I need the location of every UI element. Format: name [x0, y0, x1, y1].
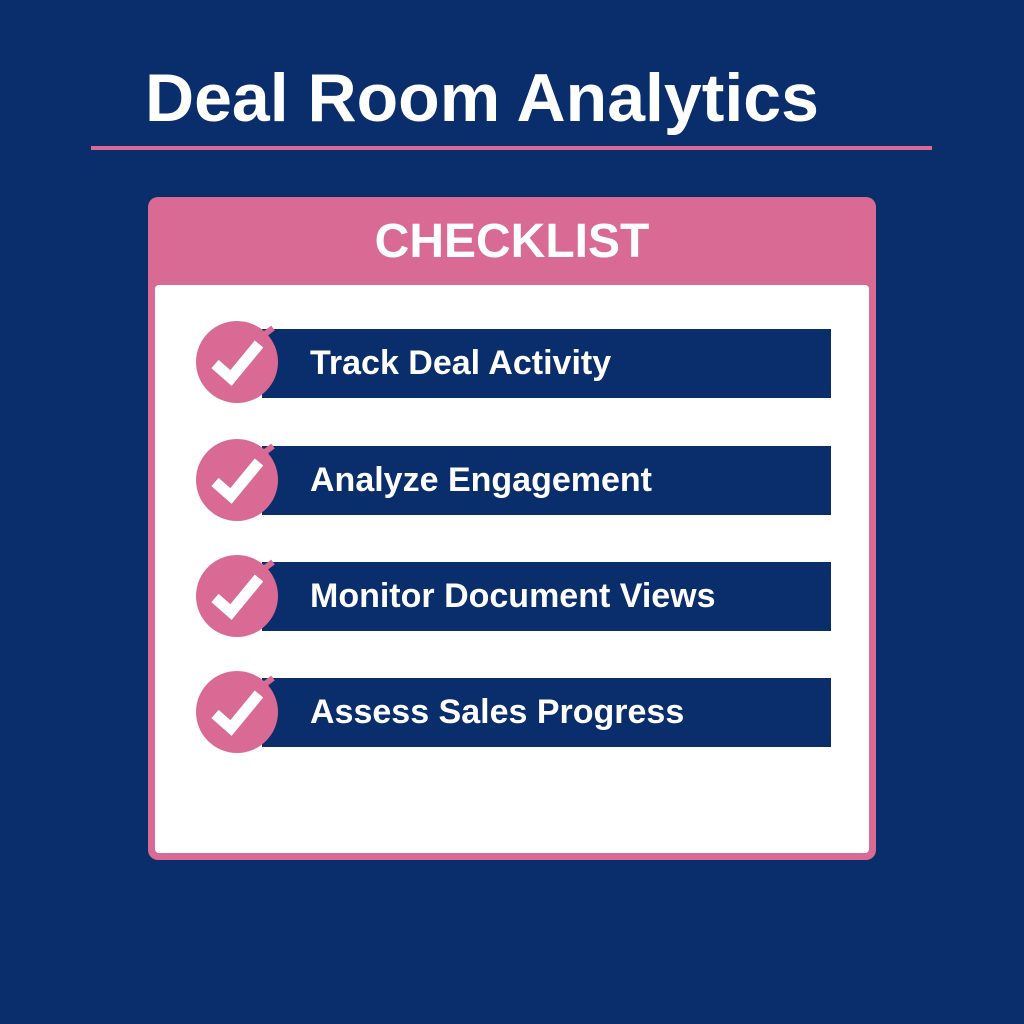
- panel body: [155, 285, 869, 853]
- bar 4: [262, 678, 831, 747]
- icon: check 3: [196, 555, 278, 637]
- bar 2: [262, 446, 831, 515]
- item 2: [196, 439, 831, 521]
- item 1: [196, 321, 831, 403]
- bar 3: [262, 562, 831, 631]
- bar 1: Track Deal Activity: [310, 344, 611, 382]
- bar 1: [262, 329, 831, 398]
- title: Deal Room Analytics: [145, 60, 819, 136]
- icon: check 4: [196, 671, 278, 753]
- title underline: [91, 146, 932, 150]
- icon: check 1: [196, 321, 278, 403]
- icon: check 2: [196, 439, 278, 521]
- bar 2: Analyze Engagement: [310, 461, 652, 499]
- bar 3: Monitor Document Views: [310, 577, 716, 615]
- panel: checklist: [148, 197, 876, 860]
- panel header: CHECKLIST: [375, 215, 649, 268]
- bar 4: Assess Sales Progress: [310, 693, 684, 731]
- item 3: [196, 555, 831, 637]
- item 4: [196, 671, 831, 753]
